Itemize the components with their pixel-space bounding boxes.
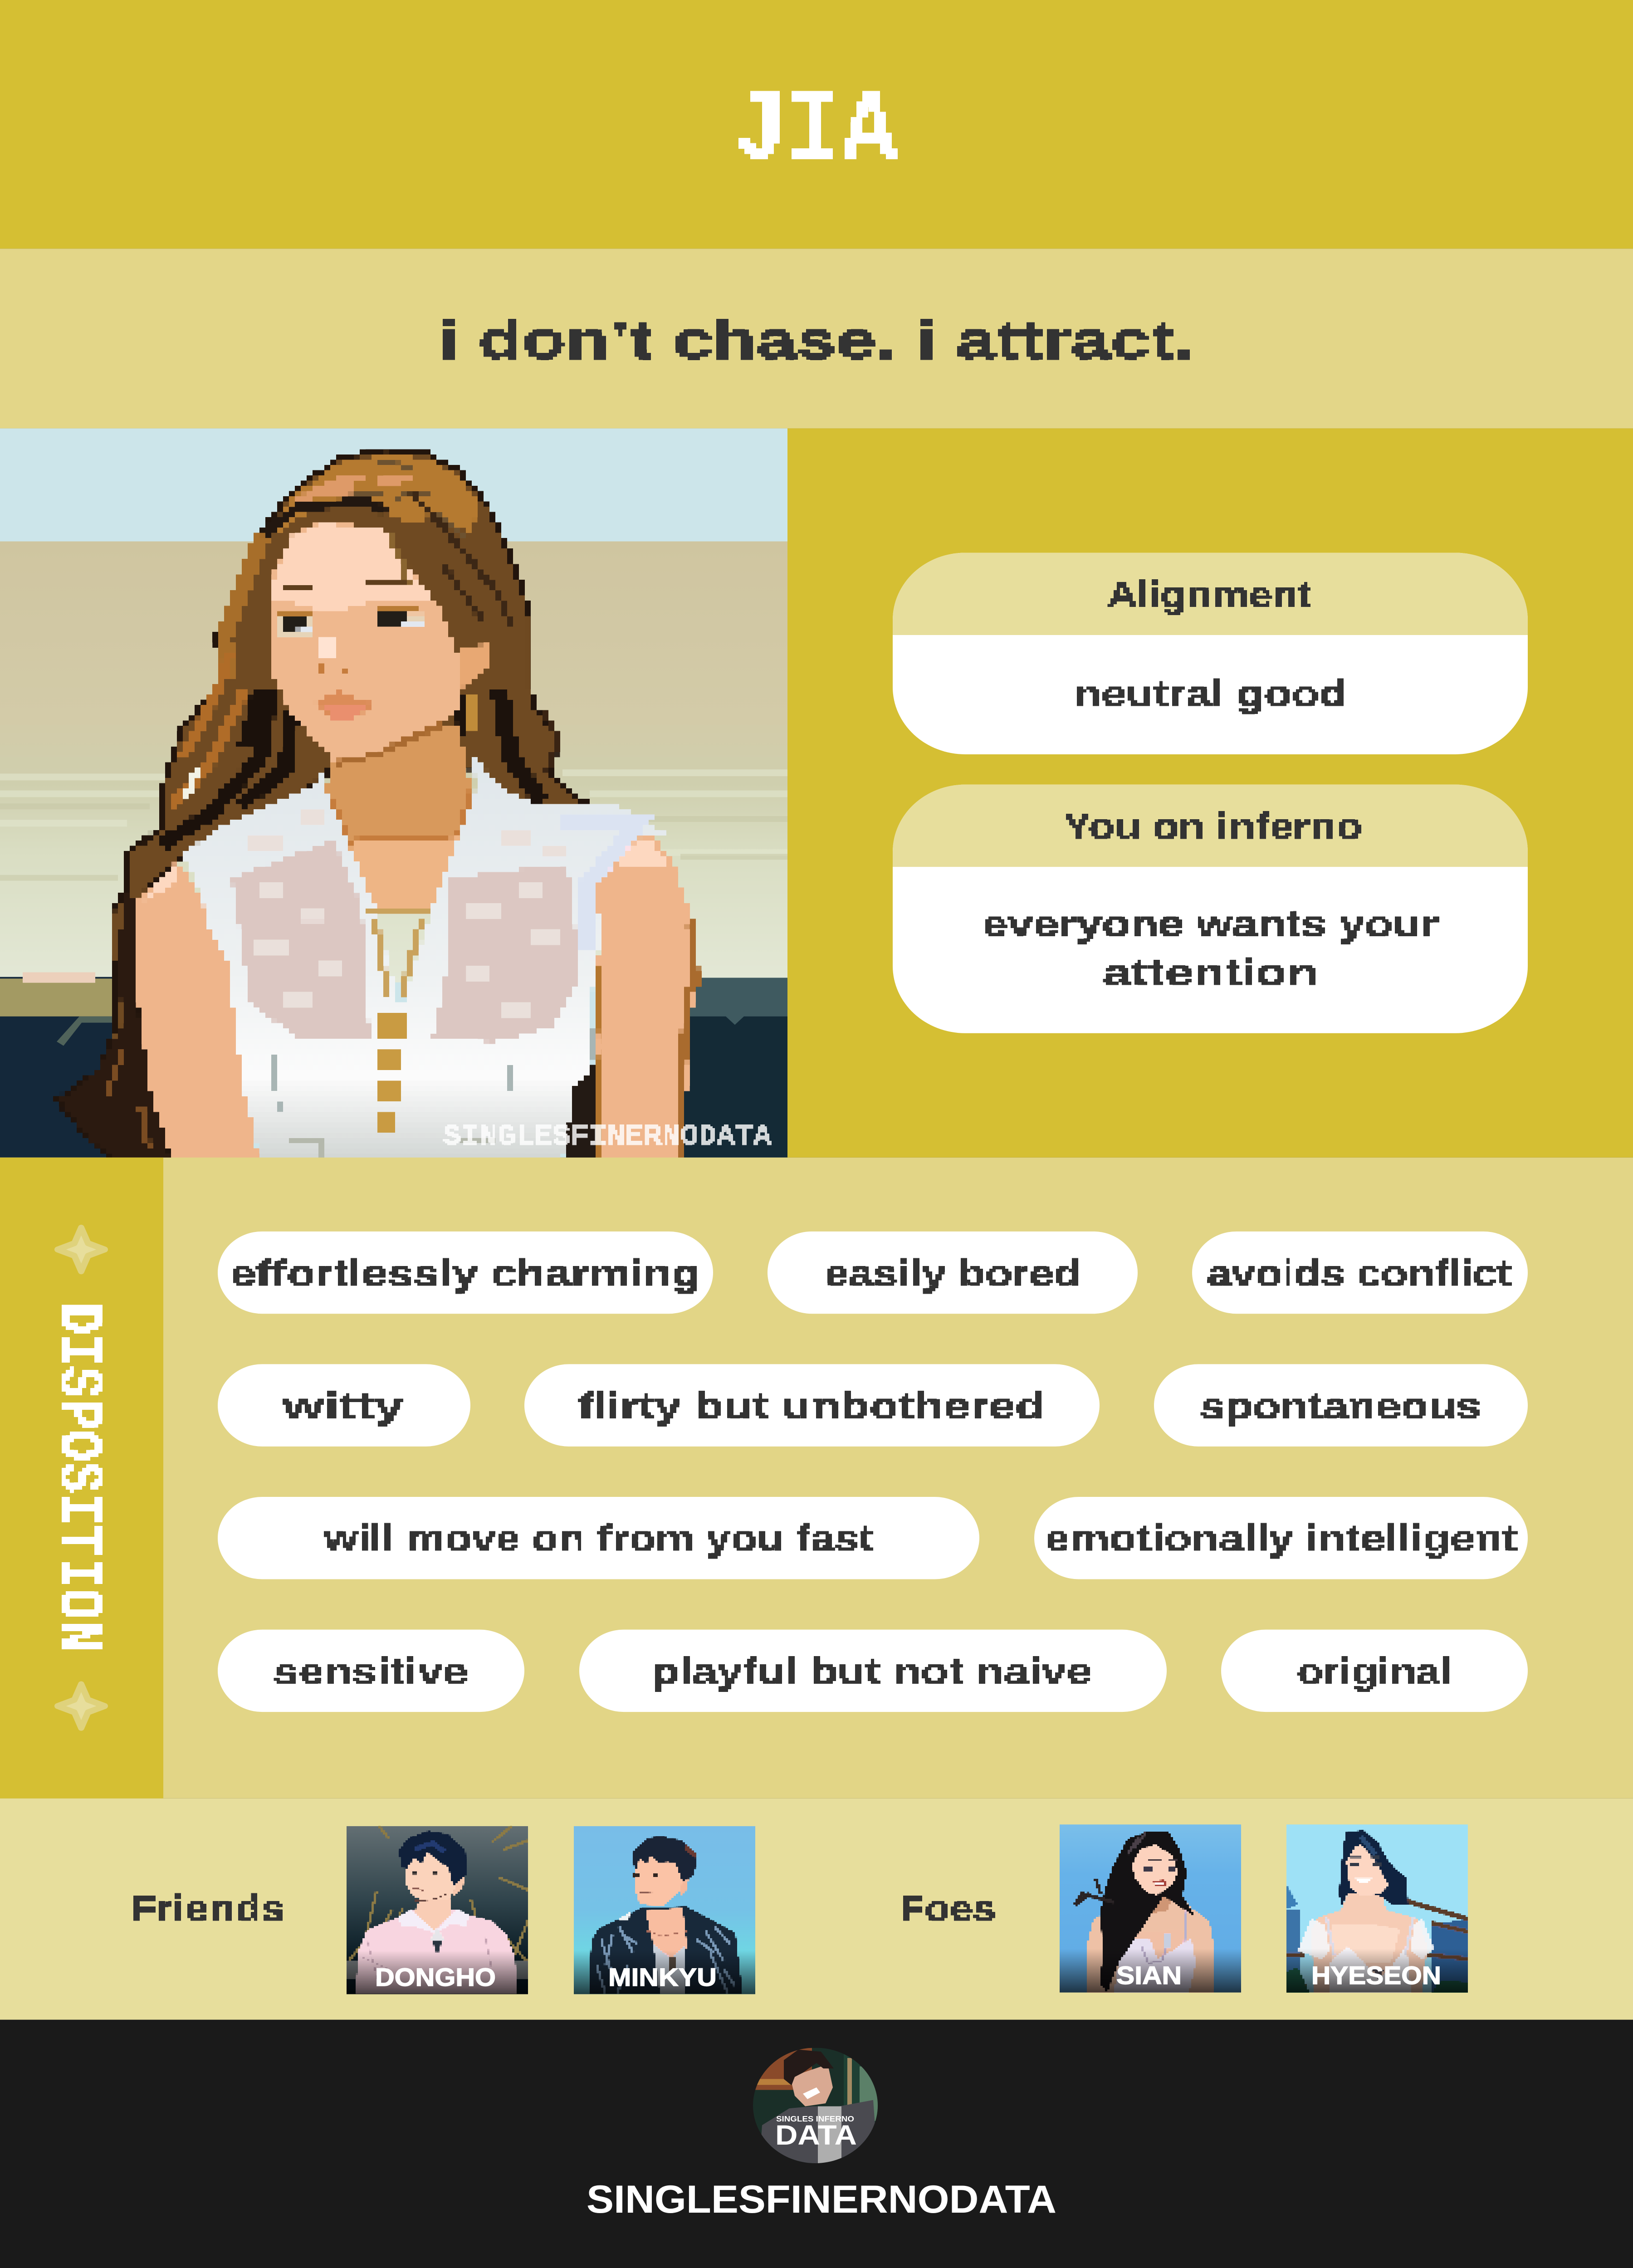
panel: character cards — [787, 428, 1633, 1158]
thumbnail: hyeseon — [1286, 1824, 1468, 1993]
card: you on inferno — [893, 785, 1528, 1033]
disposition sidebar — [0, 1158, 163, 1799]
face — [271, 521, 461, 760]
footer — [0, 2019, 1633, 2213]
card: alignment: Alignment — [1107, 574, 1312, 615]
thumbnail: minkyu — [574, 1826, 755, 1994]
portrait background scene — [0, 428, 787, 1158]
lace mottling — [250, 811, 565, 1018]
lower dark hair — [60, 888, 169, 1158]
thumbnail: dongho — [347, 1826, 528, 1994]
chip: effortlessly charming: effortlessly charming — [230, 1253, 700, 1294]
chip: will move on from you fast: will move on from you fast — [323, 1518, 873, 1559]
chip: flirty but unbothered: flirty but unbothered — [578, 1386, 1045, 1426]
label: friends: Friends — [130, 1888, 285, 1929]
card: you on inferno: You on inferno — [1063, 806, 1362, 846]
chip: original — [1221, 1630, 1528, 1712]
arms — [134, 861, 258, 1158]
card: alignment: neutral good — [1074, 673, 1347, 714]
channel avatar — [753, 2048, 880, 2165]
icon: top sparkle — [58, 1227, 105, 1271]
card: alignment — [893, 553, 1528, 754]
chip: playful but not naive: playful but not naive — [652, 1651, 1092, 1691]
chip: sensitive — [218, 1630, 524, 1712]
chip: spontaneous — [1154, 1364, 1528, 1447]
watermark: SINGLESFINERNODATA — [443, 1120, 772, 1154]
thumbnail: sian: SIAN — [1116, 1962, 1182, 1990]
chip: will move on from you fast — [218, 1497, 979, 1579]
chip: easily bored: easily bored — [824, 1253, 1081, 1294]
thumbnail: minkyu: MINKYU — [608, 1964, 717, 1991]
channel name: SINGLESFINERNODATA — [587, 2177, 1056, 2221]
vertical heading: DISPOSITION — [42, 1303, 113, 1652]
thumbnail: hyeseon: HYESEON — [1311, 1962, 1441, 1990]
panel: disposition — [0, 1158, 1633, 1799]
thumbnail: dongho: DONGHO — [375, 1964, 496, 1991]
thumbnail: sian — [1060, 1824, 1241, 1993]
chip: spontaneous: spontaneous — [1200, 1386, 1481, 1426]
icon: bottom sparkle — [58, 1684, 105, 1728]
card: you on inferno: everyone wants your — [982, 904, 1439, 944]
sleeveless white top — [182, 753, 666, 1158]
chip: avoids conflict — [1192, 1232, 1528, 1314]
panel: pixel art portrait — [0, 428, 787, 1158]
tagline band — [0, 249, 1633, 428]
chip: emotionally intelligent: emotionally intelligent — [1045, 1518, 1517, 1559]
panel: friends and foes — [0, 1799, 1633, 2020]
hair back — [57, 450, 596, 1158]
chip: effortlessly charming — [218, 1232, 713, 1314]
brows, eyes, nose, lips — [284, 584, 406, 590]
tagline text: i don’t chase. i attract. — [439, 310, 1194, 370]
chip: witty — [218, 1364, 470, 1447]
chip: flirty but unbothered — [524, 1364, 1100, 1447]
crown highlights — [268, 455, 482, 536]
chip: easily bored — [768, 1232, 1138, 1314]
portrait figure — [57, 450, 697, 1158]
necklace — [365, 912, 432, 998]
label: foes: Foes — [900, 1888, 996, 1929]
earring — [468, 695, 475, 728]
card: you on inferno: attention — [1103, 952, 1318, 993]
chip: sensitive: sensitive — [274, 1651, 468, 1691]
chip: avoids conflict: avoids conflict — [1207, 1253, 1511, 1294]
chip: witty: witty — [282, 1386, 404, 1426]
channel avatar: SINGLES INFERNO — [776, 2114, 854, 2123]
title: JIA: JIA — [733, 76, 897, 188]
chip: original: original — [1297, 1651, 1452, 1691]
channel avatar: DATA — [775, 2120, 857, 2151]
chip: playful but not naive — [579, 1630, 1167, 1712]
header band — [0, 0, 1633, 249]
chip: emotionally intelligent — [1034, 1497, 1528, 1579]
neck — [326, 724, 471, 907]
